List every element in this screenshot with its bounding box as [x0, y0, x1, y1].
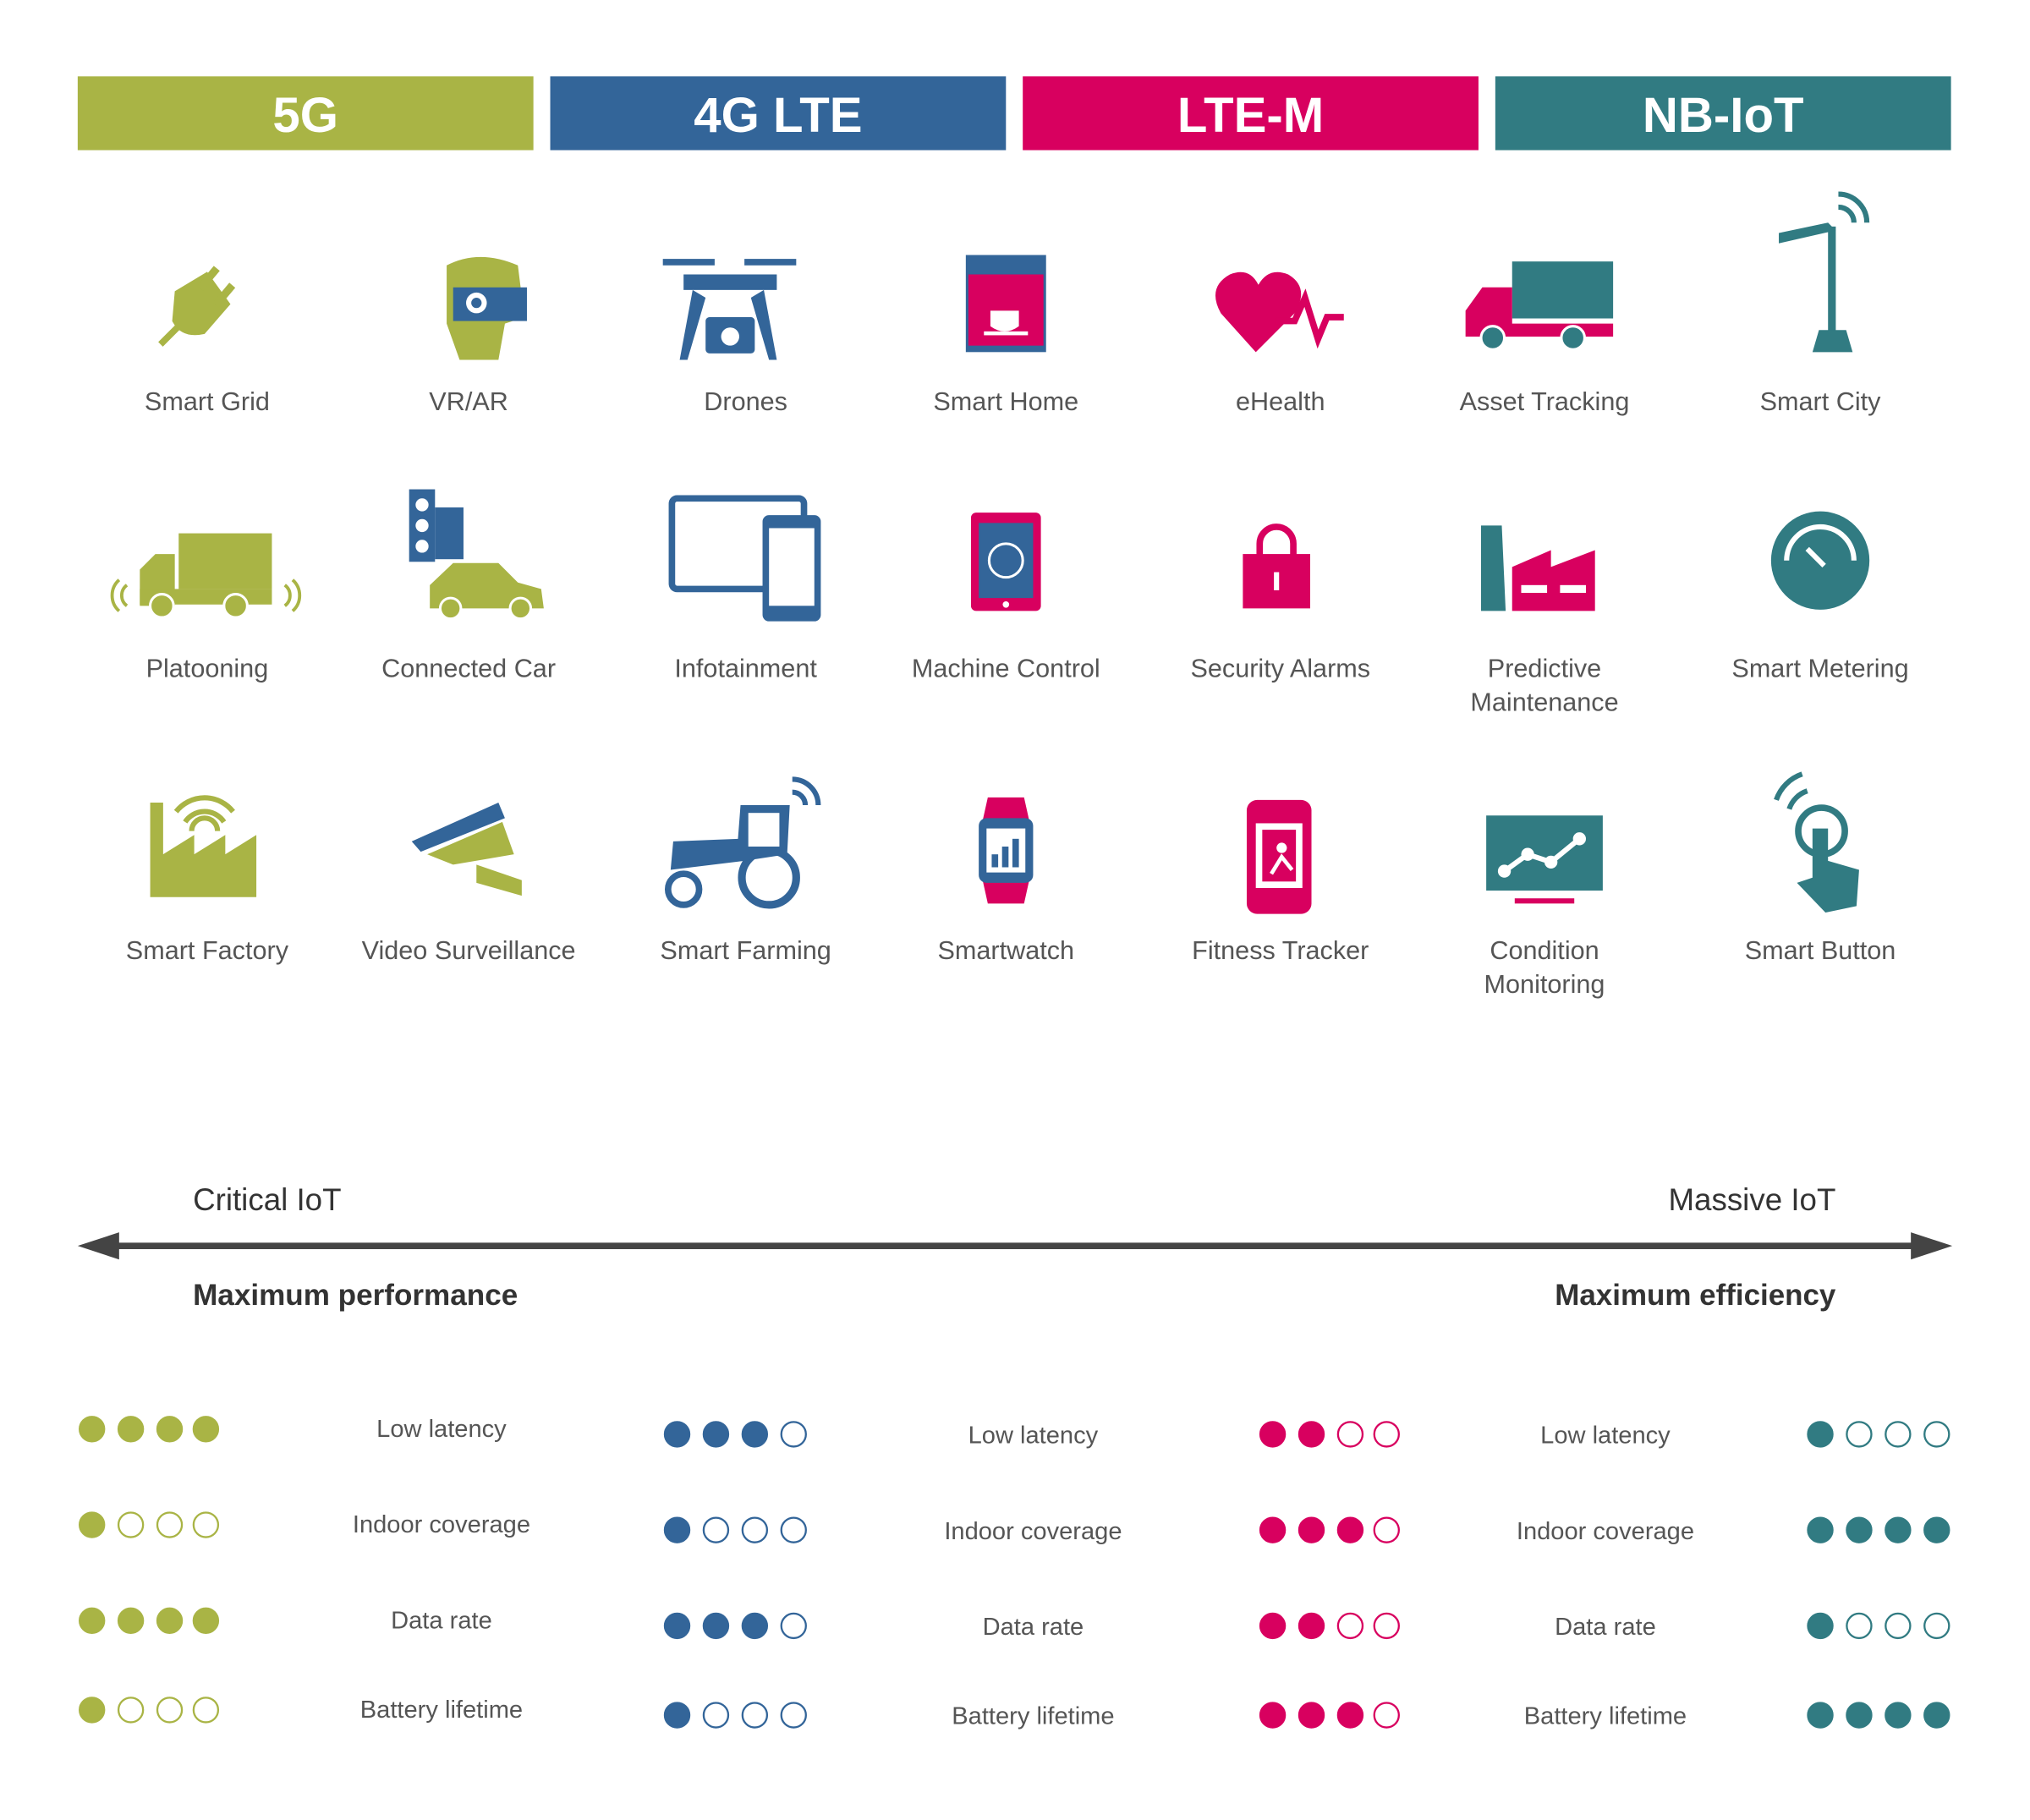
header: LTE-M: LTE-M	[1177, 88, 1324, 143]
label: VR/AR: VR/AR	[429, 387, 508, 416]
icon: security alarms	[1243, 527, 1310, 608]
ratings: 4G LTE	[665, 1422, 806, 1728]
icon: condition monitoring	[1486, 815, 1603, 903]
labels: 5G properties	[353, 1416, 530, 1724]
icon: smart button	[1776, 774, 1859, 913]
icon: smart home	[966, 255, 1046, 352]
labels: LTE-M properties: Indoor coverage	[1517, 1518, 1694, 1545]
text: Maximum efficiency: Maximum efficiency	[1555, 1279, 1836, 1312]
icon: platooning	[112, 534, 299, 617]
icon: smart metering	[1771, 512, 1869, 610]
header: 5G: 5G	[272, 88, 338, 143]
labels: 5G properties: Indoor coverage	[353, 1511, 530, 1538]
header: 5G	[78, 76, 534, 151]
text: Maximum performance: Maximum performance	[193, 1279, 518, 1312]
icon: asset tracking	[1466, 261, 1613, 349]
labels: LTE-M properties: Battery lifetime	[1524, 1703, 1687, 1730]
icon: VR/AR	[447, 257, 527, 360]
icon: smart grid	[161, 266, 235, 344]
labels: 5G properties: Battery lifetime	[360, 1697, 523, 1724]
label: eHealth: eHealth	[1236, 387, 1325, 416]
labels: 5G properties: Low latency	[376, 1416, 507, 1443]
label: Smartwatch: Smartwatch	[937, 936, 1074, 965]
label: Smart Metering: Smart Metering	[1731, 654, 1909, 682]
icon: connected car	[409, 490, 544, 619]
label: Predictive Maintenance: Predictive	[1488, 654, 1601, 682]
icon: infotainment	[672, 498, 820, 622]
labels: LTE-M properties: Low latency	[1540, 1423, 1671, 1450]
text: Critical IoT: Critical IoT	[193, 1182, 342, 1217]
text: Massive IoT: Massive IoT	[1668, 1182, 1835, 1217]
label: Smart Grid: Smart Grid	[145, 387, 270, 416]
header: 4G LTE: 4G LTE	[694, 88, 863, 143]
label: Smart Button: Smart Button	[1745, 936, 1896, 965]
ratings: 5G	[80, 1417, 218, 1722]
header: NB-IoT	[1495, 76, 1951, 151]
label: Condition Monitoring: Condition	[1490, 936, 1599, 965]
label: Infotainment: Infotainment	[674, 654, 817, 682]
label: Drones: Drones	[704, 387, 787, 416]
icon: machine control	[971, 513, 1041, 611]
label: Predictive Maintenance: Maintenance	[1470, 688, 1619, 716]
header: LTE-M	[1023, 76, 1479, 151]
icon: smartwatch	[979, 798, 1033, 903]
labels: 4G LTE properties: Data rate	[983, 1614, 1084, 1641]
icon: smart farming	[668, 779, 818, 905]
labels: LTE-M properties: Data rate	[1555, 1614, 1656, 1641]
label: Smart Factory: Smart Factory	[126, 936, 289, 965]
label: Condition Monitoring: Monitoring	[1484, 970, 1605, 999]
arrow: IoT spectrum	[78, 1232, 1952, 1259]
ratings: NB-IoT	[1808, 1422, 1949, 1728]
icon: fitness tracker	[1247, 800, 1312, 914]
header: 4G LTE	[551, 76, 1006, 151]
label: Smart Home: Smart Home	[933, 387, 1078, 416]
icon: smart city	[1779, 195, 1867, 352]
labels: 5G properties: Data rate	[391, 1607, 492, 1634]
labels: LTE-M properties	[1517, 1423, 1694, 1730]
label: Video Surveillance: Video Surveillance	[362, 936, 576, 965]
labels: 4G LTE properties: Indoor coverage	[944, 1518, 1122, 1545]
icon: drones	[663, 259, 796, 360]
label: Asset Tracking: Asset Tracking	[1460, 387, 1629, 416]
label: Security Alarms: Security Alarms	[1190, 654, 1370, 682]
label: Connected Car: Connected Car	[381, 654, 556, 682]
label: Fitness Tracker: Fitness Tracker	[1192, 936, 1369, 965]
ratings: LTE-M	[1260, 1422, 1399, 1728]
header: NB-IoT: NB-IoT	[1643, 88, 1804, 143]
labels: 4G LTE properties: Battery lifetime	[952, 1703, 1115, 1730]
label: Smart City: Smart City	[1760, 387, 1881, 416]
label: Platooning: Platooning	[146, 654, 268, 682]
label: Smart Farming: Smart Farming	[660, 936, 831, 965]
icon: smart factory	[151, 798, 256, 897]
icon: predictive maintenance	[1481, 525, 1595, 611]
labels: 4G LTE properties: Low latency	[968, 1423, 1099, 1450]
labels: 4G LTE properties	[944, 1423, 1122, 1730]
icon: video surveillance	[412, 803, 522, 896]
label: Machine Control: Machine Control	[912, 654, 1100, 682]
icon: eHealth	[1215, 272, 1344, 352]
